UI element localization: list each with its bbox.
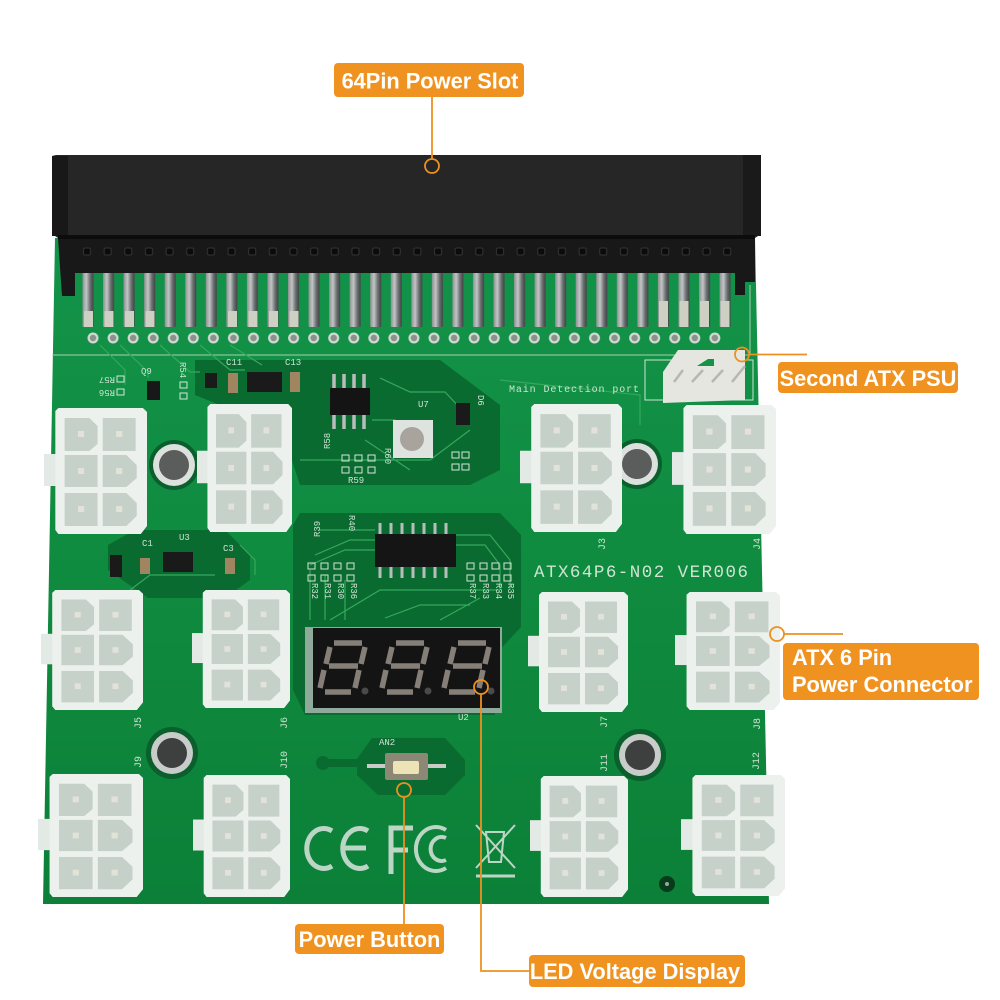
diode D4 xyxy=(110,555,122,577)
connector labels: J11 xyxy=(600,754,611,772)
silkscreen divider xyxy=(52,285,750,355)
board name: ATX64P6-N02 VER006 xyxy=(534,563,748,583)
IC U1 xyxy=(375,534,456,567)
callout: ATX 6 Pin Power Connector: Power Connector xyxy=(792,672,973,697)
component labels: R32 xyxy=(309,583,319,599)
callout: Second ATX PSU: Second ATX PSU xyxy=(780,366,956,391)
connector labels: J7 xyxy=(600,716,611,728)
component labels: C1 xyxy=(142,539,153,549)
component labels: AN2 xyxy=(379,738,395,748)
capacitors C1 C4 xyxy=(140,558,150,574)
connector J6 xyxy=(192,590,290,708)
callout: LED Voltage Display xyxy=(474,680,745,987)
component labels: R56 xyxy=(99,387,115,397)
component labels: R30 xyxy=(335,583,345,599)
component labels: R39 xyxy=(313,521,323,537)
resistor footprints xyxy=(117,376,511,581)
component labels xyxy=(99,358,515,748)
component labels: C13 xyxy=(285,358,301,368)
connector labels: J10 xyxy=(280,751,291,769)
component labels: R36 xyxy=(348,583,358,599)
capacitors xyxy=(228,373,238,393)
regulator xyxy=(247,372,282,392)
circuit traces xyxy=(100,345,640,620)
connector J1 xyxy=(44,408,147,534)
component labels: R34 xyxy=(493,583,503,599)
circuit board xyxy=(38,155,785,904)
connector J11 xyxy=(530,776,628,897)
connector J10 xyxy=(193,775,290,897)
slot upper housing xyxy=(52,155,761,238)
component labels: C11 xyxy=(226,358,242,368)
connector labels: J9 xyxy=(134,756,145,768)
LED voltage display xyxy=(305,627,502,713)
callout: Power Button xyxy=(295,783,444,954)
callout: ATX 6 Pin Power Connector: ATX 6 Pin xyxy=(792,645,892,670)
connector J4 xyxy=(672,405,776,534)
small via xyxy=(659,876,675,892)
component labels: R58 xyxy=(323,433,333,449)
component labels: R35 xyxy=(505,583,515,599)
connector J8 xyxy=(675,592,780,710)
silkscreen text xyxy=(99,358,764,876)
component labels: R57 xyxy=(99,374,115,384)
component labels: R31 xyxy=(322,583,332,599)
IC U6 xyxy=(330,388,370,415)
power button xyxy=(367,753,446,780)
component labels: R40 xyxy=(346,515,356,531)
regulator U3 xyxy=(163,552,193,572)
connector labels: J6 xyxy=(280,717,291,729)
solder pads xyxy=(83,328,725,348)
certification marks xyxy=(307,825,515,876)
callout: 64Pin Power Slot xyxy=(334,63,524,173)
64-pin slot xyxy=(52,155,761,348)
slot lower housing xyxy=(58,238,755,296)
connector J7 xyxy=(528,592,628,712)
component labels: D6 xyxy=(475,395,485,406)
component labels: U7 xyxy=(418,400,429,410)
connector labels: J5 xyxy=(134,717,145,729)
connector J3 xyxy=(520,404,622,532)
connector labels: J4 xyxy=(753,538,764,550)
component labels: R60 xyxy=(382,448,392,464)
component labels: Q9 xyxy=(141,367,152,377)
second ATX PSU socket xyxy=(645,350,753,403)
callout: Second ATX PSU xyxy=(735,348,958,393)
smd components xyxy=(110,372,511,581)
pins xyxy=(82,273,732,328)
connector J9 xyxy=(38,774,143,897)
diode D6 xyxy=(456,403,470,425)
callout: Power Button: Power Button xyxy=(299,927,440,952)
connector labels: J12 xyxy=(752,752,763,770)
component labels: U2 xyxy=(458,713,469,723)
connectors xyxy=(38,404,785,897)
component labels: U3 xyxy=(179,533,190,543)
connector labels: J8 xyxy=(753,718,764,730)
component labels: R59 xyxy=(348,476,364,486)
component labels: R37 xyxy=(467,583,477,599)
callout: ATX 6 Pin Power Connector xyxy=(770,627,979,700)
pale pin tips xyxy=(84,301,730,327)
connector labels xyxy=(134,538,764,772)
dark copper regions xyxy=(108,360,521,795)
RGB LED U7 xyxy=(393,420,433,458)
component labels: C3 xyxy=(223,544,234,554)
connector J2 xyxy=(197,404,292,532)
diode D5 xyxy=(205,373,217,388)
component labels: R33 xyxy=(480,583,490,599)
connector J5 xyxy=(41,590,143,710)
connector labels: J3 xyxy=(598,538,609,550)
transistor Q9 xyxy=(147,381,160,400)
callout: LED Voltage Display: LED Voltage Display xyxy=(530,959,740,984)
component labels: R54 xyxy=(177,362,187,378)
connector J12 xyxy=(681,775,785,896)
mounting holes xyxy=(146,439,666,781)
detection port text: Main Detection port xyxy=(509,384,639,396)
board body xyxy=(43,238,769,904)
callout: 64Pin Power Slot: 64Pin Power Slot xyxy=(342,68,518,94)
